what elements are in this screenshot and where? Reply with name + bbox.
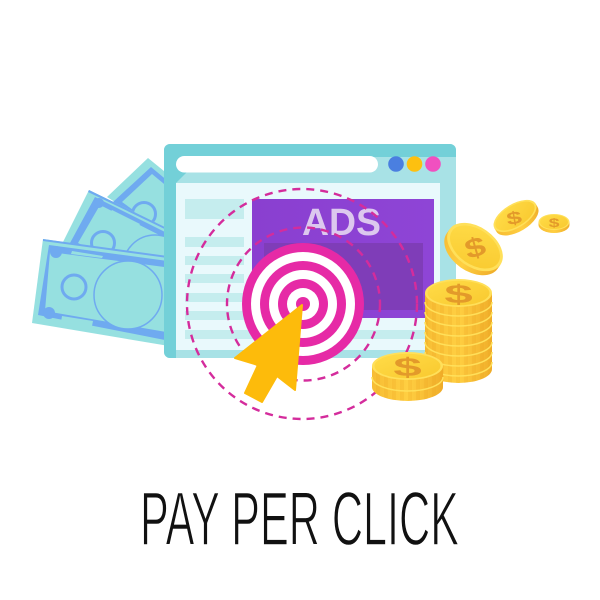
icon: coin stack: [425, 279, 492, 383]
icon: flying coin small: [538, 214, 570, 233]
icon: middle banknote: [63, 190, 187, 300]
button: blue: [388, 156, 404, 172]
icon: front banknote: [32, 239, 175, 347]
text lines: [185, 199, 425, 339]
panel: browser window: [164, 144, 456, 358]
panel: ads banner: [252, 199, 434, 318]
window top and left bar: [164, 144, 456, 358]
icon: front coins: [372, 352, 443, 401]
icon: back banknote: [107, 158, 175, 240]
coin symbol: $: [505, 207, 524, 229]
coin symbol: $: [461, 230, 489, 265]
icon: flying coin large: [435, 213, 512, 285]
window frame: [164, 144, 456, 358]
button: yellow: [407, 156, 422, 172]
coin symbol: $: [549, 217, 559, 230]
button: pink: [425, 156, 441, 172]
dashed ripple: inner: [227, 228, 380, 380]
coin symbol: $: [393, 353, 422, 382]
ads label: ADS: [302, 202, 381, 244]
content area: [176, 183, 440, 350]
icon: target: [242, 243, 364, 365]
coin symbol: $: [444, 280, 473, 309]
address bar: [176, 156, 378, 172]
panel: banknotes: [32, 158, 187, 347]
icon: cursor arrow: [235, 305, 302, 402]
dashed ripple: outer: [187, 189, 417, 419]
icon: flying coin medium: [488, 193, 544, 242]
